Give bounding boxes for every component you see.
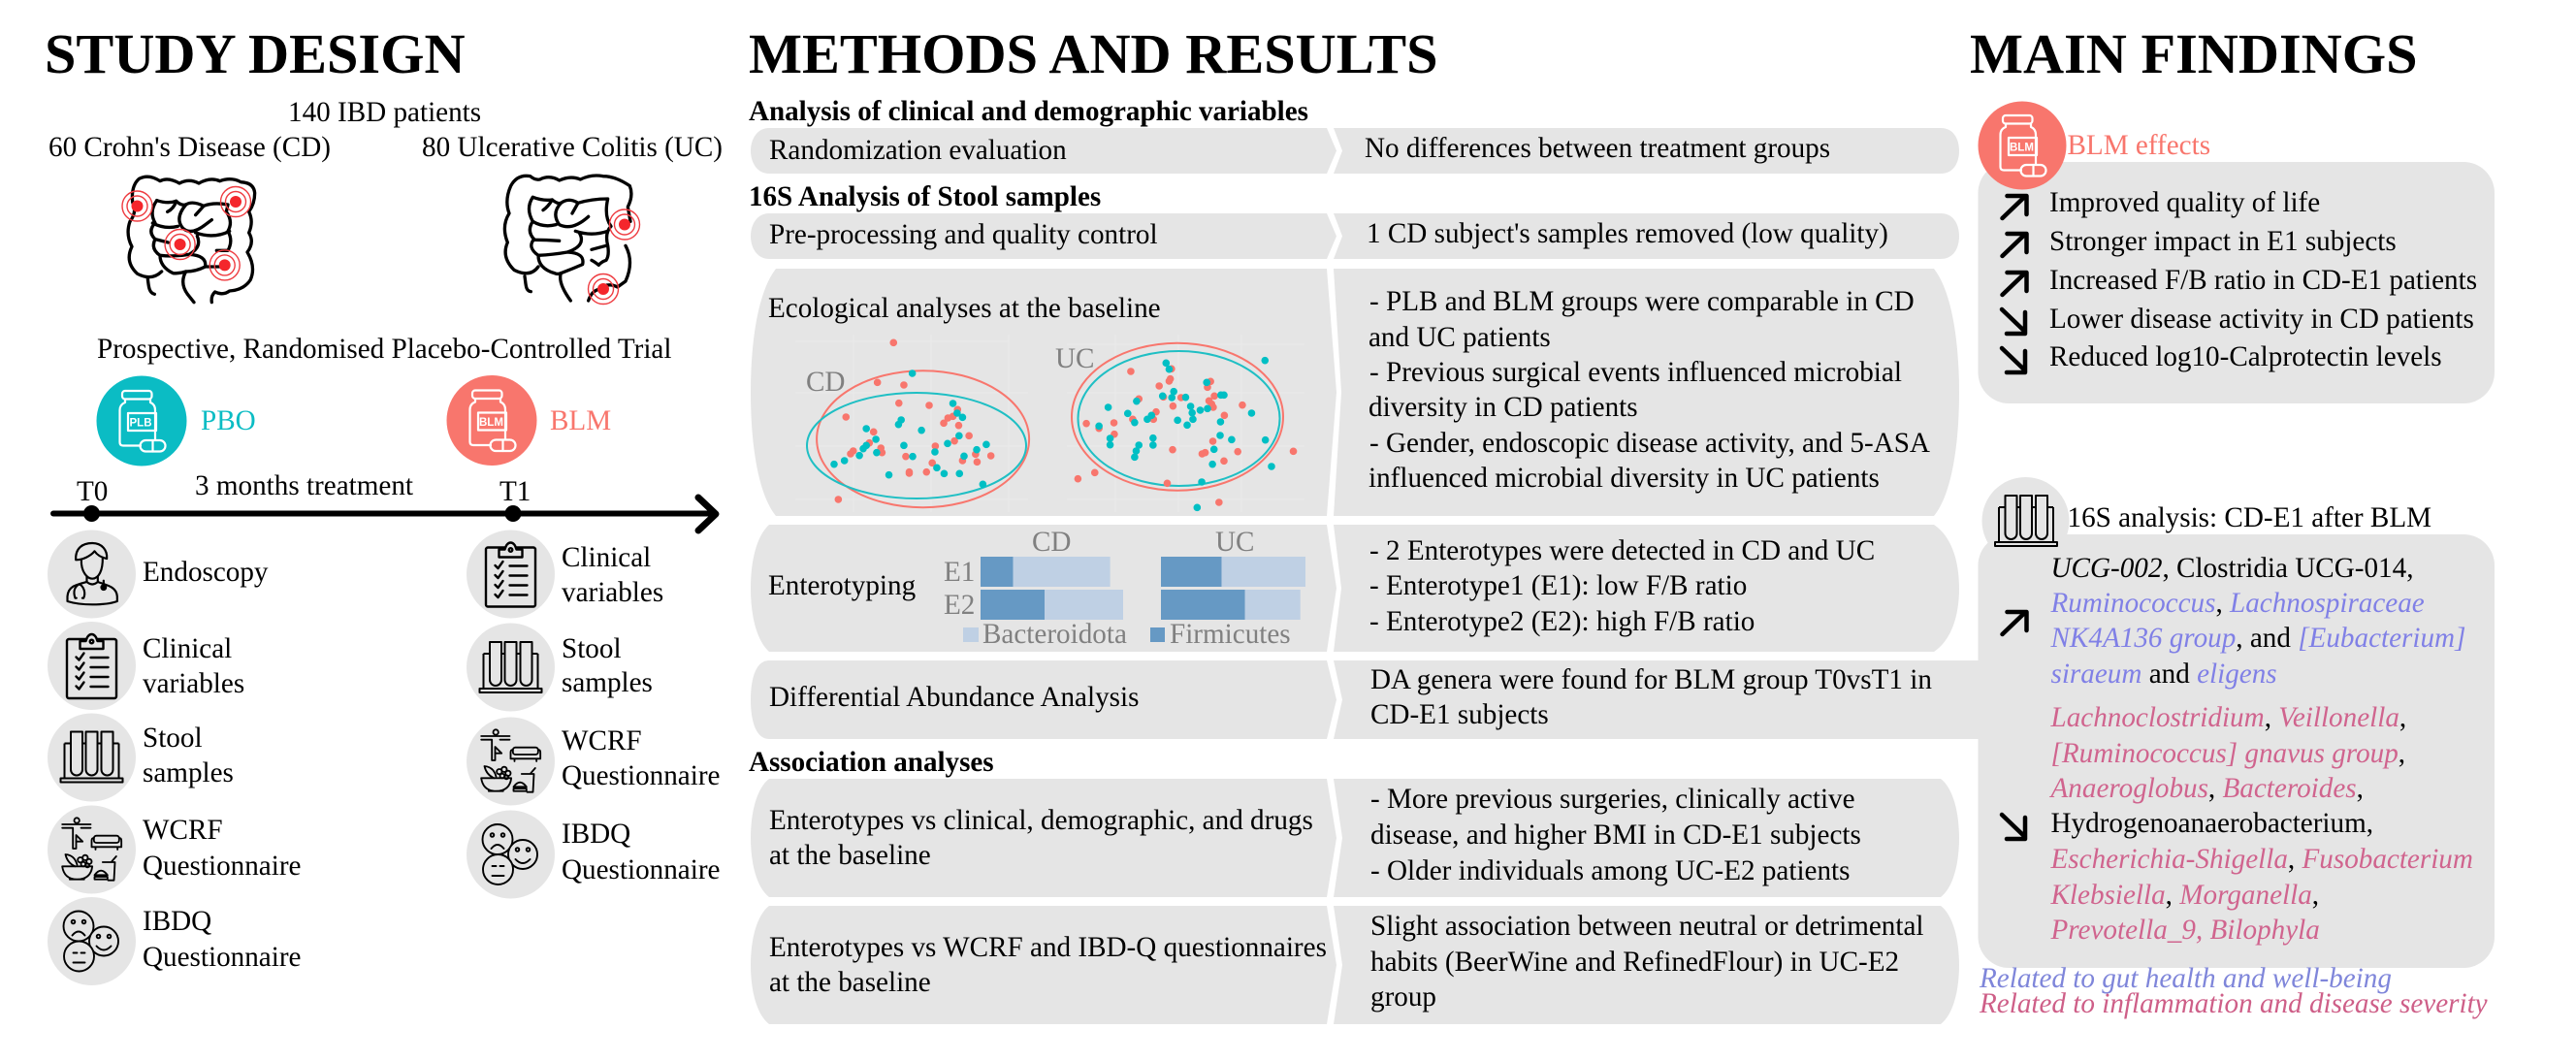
T1 item: WCRF questionnaire: WCRF: [562, 725, 642, 756]
heading: association analyses: Association analyses: [749, 747, 994, 778]
T0 item: WCRF questionnaire: [48, 805, 301, 894]
finding: reduced calprotectin: Reduced log10-Calprotectin levels: [2049, 341, 2442, 372]
list: decreased genera: Klebsiella, Morganella,: [2050, 880, 2319, 911]
row: differential abundance: DA genera were found for BLM group T0vsT1 in: [1370, 664, 1932, 695]
trial description: Prospective, Randomised Placebo-Controlled Trial: [97, 334, 671, 365]
T0 item: WCRF questionnaire: WCRF: [143, 815, 223, 846]
label: BLM: BLM: [550, 405, 611, 436]
T0 item: stool samples: Stool: [143, 723, 203, 754]
T0 item: stool samples: samples: [143, 757, 234, 788]
finding: increased F/B ratio: Increased F/B ratio in CD-E1 patients: [2049, 265, 2477, 296]
row: enterotypes vs clinical: at the baseline: [769, 840, 931, 871]
T0 item: stool samples: [48, 714, 234, 801]
list: increased genera: Ruminococcus, Lachnospiraceae: [2050, 588, 2425, 619]
row: enterotypes vs questionnaires: group: [1370, 981, 1436, 1013]
icon: BLM bottle: [446, 375, 537, 466]
row: ecological analyses: Ecological analyses at the baseline: [768, 293, 1161, 324]
title: study design: STUDY DESIGN: [45, 22, 466, 85]
row: enterotyping: Enterotyping: [768, 570, 917, 601]
icon: BLM bottle: BLM: [479, 417, 503, 429]
row: enterotypes vs clinical: - Older individuals among UC-E2 patients: [1370, 855, 1851, 886]
T0 item: endoscopy: Endoscopy: [143, 557, 269, 588]
row: ecological analyses: [751, 269, 1959, 516]
panel: 16S analysis: [1979, 477, 2495, 968]
list: decreased genera: Anaeroglobus, Bacteroides,: [2048, 773, 2364, 804]
T0 item: endoscopy: [48, 530, 269, 619]
list: increased genera: [2050, 553, 2465, 690]
row: pre-processing: [751, 213, 1959, 259]
finding: stronger impact: Stronger impact in E1 subjects: [2049, 226, 2397, 257]
T0 item: clinical variables: Clinical: [143, 633, 232, 664]
label: treatment duration: 3 months treatment: [195, 470, 413, 501]
T0 item: IBDQ questionnaire: IBDQ: [143, 906, 211, 937]
row: randomization evaluation: No differences between treatment groups: [1365, 133, 1830, 164]
T1 item: clinical variables: Clinical: [562, 542, 651, 573]
row: enterotypes vs questionnaires: Enterotypes vs WCRF and IBD-Q questionnaires: [769, 932, 1327, 963]
icon: BLM bottle: [1979, 101, 2066, 190]
chart: enterotype stacked bars: E2: [944, 590, 975, 621]
heading: clinical and demographic analysis: Analysis of clinical and demographic variables: [749, 96, 1308, 127]
T1 item: IBDQ questionnaire: [467, 811, 720, 898]
icon: sample tubes: [1995, 496, 2057, 546]
icon: intestine with Crohn's disease lesions: [122, 177, 255, 303]
row: ecological analyses: diversity in CD patients: [1368, 392, 1638, 423]
chart: enterotype stacked bars: Bacteroidota: [982, 619, 1127, 650]
row: pre-processing: Pre-processing and quality control: [769, 219, 1158, 250]
legend: inflammation: Related to inflammation and disease severity: [1979, 988, 2488, 1019]
row: enterotyping: - Enterotype1 (E1): low F/B ratio: [1369, 570, 1747, 601]
list: increased genera: UCG-002, Clostridia UCG-014,: [2050, 553, 2413, 584]
row: ecological analyses: and UC patients: [1368, 322, 1551, 353]
T1 item: WCRF questionnaire: Questionnaire: [562, 760, 720, 791]
row: randomization evaluation: Randomization evaluation: [769, 135, 1067, 166]
list: decreased genera: Hydrogenoanaerobacterium,: [2050, 808, 2373, 839]
label: PBO: PBO: [201, 405, 256, 436]
row: enterotypes vs clinical: Enterotypes vs clinical, demographic, and drugs: [769, 805, 1313, 836]
icon: intestine with ulcerative colitis lesions: [504, 176, 640, 305]
row: enterotyping: - 2 Enterotypes were detected in CD and UC: [1369, 535, 1875, 566]
icon: placebo bottle: PLB: [130, 417, 151, 429]
T1 item: WCRF questionnaire: [467, 718, 720, 805]
icon: placebo bottle: [97, 376, 186, 466]
T0 item: WCRF questionnaire: Questionnaire: [143, 851, 301, 882]
timeline arrow: [53, 498, 716, 530]
T0 item: IBDQ questionnaire: Questionnaire: [143, 942, 301, 973]
row: enterotypes vs questionnaires: Slight association between neutral or detrimental: [1370, 911, 1924, 942]
arrow: decreased genera: [2002, 815, 2025, 839]
row: enterotypes vs questionnaires: [751, 906, 1959, 1024]
list: decreased genera: Lachnoclostridium, Veillonella,: [2050, 702, 2406, 733]
T1 item: clinical variables: [467, 530, 663, 619]
T0 item: IBDQ questionnaire: [48, 897, 301, 985]
list: decreased genera: [2048, 702, 2473, 946]
arrow: increased genera: [2002, 612, 2027, 634]
T0 item: clinical variables: [48, 622, 244, 710]
list: increased genera: NK4A136 group, and [Eubacterium]: [2050, 623, 2465, 654]
row: ecological analyses: - Previous surgical events influenced microbial: [1369, 357, 1902, 388]
heading: 16S analysis: 16S Analysis of Stool samples: [749, 181, 1101, 212]
heading: BLM effects: BLM effects: [2068, 130, 2210, 161]
list: decreased genera: Prevotella_9, Bilophyla: [2050, 915, 2320, 946]
T1 item: clinical variables: variables: [562, 577, 663, 608]
row: differential abundance: CD-E1 subjects: [1370, 699, 1549, 730]
T1 item: IBDQ questionnaire: IBDQ: [562, 819, 630, 850]
heading: 16S analysis CD-E1 after BLM: 16S analysis: CD-E1 after BLM: [2068, 502, 2431, 533]
row: enterotypes vs questionnaires: habits (BeerWine and RefinedFlour) in UC-E2: [1370, 947, 1899, 978]
row: ecological analyses: influenced microbial diversity in UC patients: [1368, 463, 1880, 494]
row: enterotypes vs questionnaires: at the baseline: [769, 967, 931, 998]
panel: study design: [48, 97, 723, 985]
chart: enterotype stacked bars: Firmicutes: [1170, 619, 1291, 650]
title: main findings: MAIN FINDINGS: [1970, 22, 2418, 85]
T1 item: stool samples: samples: [562, 667, 653, 698]
legend: gut health: Related to gut health and well-being: [1979, 963, 2392, 994]
title: methods and results: METHODS AND RESULTS: [749, 22, 1438, 85]
finding: lower disease activity: Lower disease activity in CD patients: [2049, 304, 2474, 335]
chart: enterotype stacked bars: [944, 527, 1305, 650]
T1 item: stool samples: [467, 623, 653, 712]
panel: methods and results: [749, 96, 1979, 1024]
chart: ordination scatter CD and UC: [795, 335, 1304, 512]
finding: improved quality of life: Improved quality of life: [2049, 187, 2320, 218]
chart: ordination scatter CD and UC: CD: [806, 367, 845, 398]
label: Crohn's disease: 60 Crohn's Disease (CD): [48, 132, 331, 163]
row: ecological analyses: - Gender, endoscopic disease activity, and 5-ASA: [1369, 428, 1930, 459]
label: T0: T0: [77, 476, 108, 507]
row: enterotypes vs clinical: [751, 779, 1959, 897]
icon: BLM bottle: BLM: [2010, 142, 2034, 153]
chart: ordination scatter CD and UC: UC: [1055, 343, 1094, 374]
row: differential abundance: Differential Abundance Analysis: [769, 682, 1139, 713]
row: randomization evaluation: [751, 128, 1959, 174]
row: differential abundance: [751, 660, 1979, 739]
chart: enterotype stacked bars: UC: [1215, 527, 1254, 558]
list: decreased genera: [Ruminococcus] gnavus group,: [2050, 738, 2405, 769]
label: T1: T1: [499, 476, 531, 507]
T1 item: IBDQ questionnaire: Questionnaire: [562, 854, 720, 885]
list: decreased genera: Escherichia-Shigella, Fusobacterium: [2050, 844, 2473, 875]
chart: enterotype stacked bars: CD: [1032, 527, 1071, 558]
patient count: 140 IBD patients: [288, 97, 481, 128]
row: enterotyping: [751, 525, 1959, 652]
label: ulcerative colitis: 80 Ulcerative Colitis (UC): [422, 132, 723, 163]
row: ecological analyses: - PLB and BLM groups were comparable in CD: [1369, 286, 1915, 317]
row: enterotypes vs clinical: - More previous surgeries, clinically active: [1370, 784, 1855, 815]
row: pre-processing: 1 CD subject's samples removed (low quality): [1367, 218, 1888, 249]
row: enterotypes vs clinical: disease, and higher BMI in CD-E1 subjects: [1370, 820, 1861, 851]
panel: BLM effects: [1979, 101, 2495, 403]
chart: enterotype stacked bars: E1: [944, 557, 975, 588]
row: enterotyping: - Enterotype2 (E2): high F/B ratio: [1369, 606, 1755, 637]
T0 item: clinical variables: variables: [143, 668, 244, 699]
T1 item: stool samples: Stool: [562, 633, 622, 664]
list: increased genera: siraeum and eligens: [2050, 659, 2277, 690]
